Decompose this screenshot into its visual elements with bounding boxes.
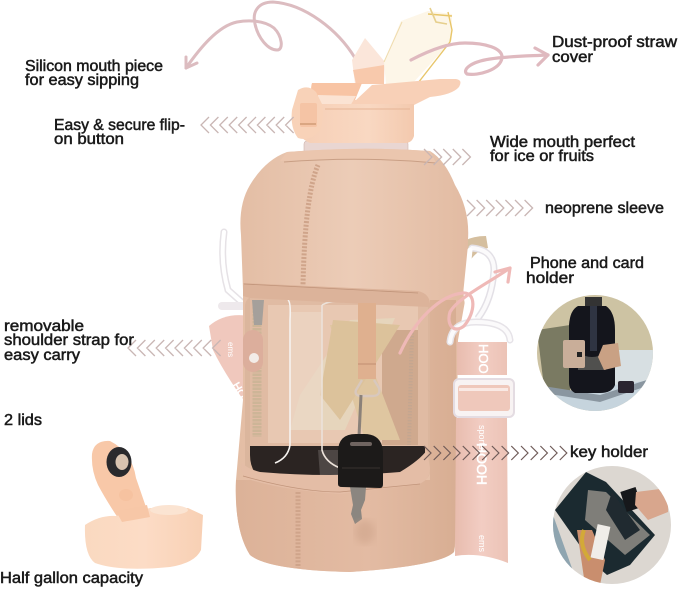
neoprene sleeve (236, 149, 468, 572)
lid brim (311, 83, 362, 100)
right inner stitched edge (409, 330, 412, 445)
chevrons: shoulder strap (128, 340, 221, 356)
lid (292, 79, 460, 143)
silicon mouth piece (352, 38, 385, 84)
label: neoprene sleeve: neoprene sleeve (545, 200, 664, 217)
chevrons: neoprene sleeve (467, 200, 533, 216)
half-gallon spare lid (85, 441, 203, 569)
tan webbing strap: right (444, 236, 488, 345)
pink arrow: phone and card holder (400, 268, 510, 353)
flip button (292, 87, 323, 139)
front strap with buckle: HOOH (474, 443, 490, 485)
white carabiner: left (222, 232, 246, 306)
cream cross straps (323, 318, 395, 430)
pink curly arrow: dust-proof straw cover (411, 43, 548, 74)
strap behind bottle: left: HOOH (229, 380, 256, 415)
label: wide mouth (490, 134, 636, 165)
lower pocket band (241, 450, 430, 494)
zipper pull (243, 330, 263, 372)
white carabiner: right (450, 248, 510, 342)
label: silicon mouth piece (25, 58, 163, 89)
strap behind bottle: left: ems (226, 342, 235, 357)
label: half gallon capacity: Half gallon capacity (0, 570, 143, 587)
white buckle (454, 379, 514, 417)
label: silicon mouth piece: Silicon mouth piece (25, 58, 163, 75)
zipper (252, 300, 262, 437)
strap behind bottle: left (209, 315, 256, 415)
label: wide mouth: Wide mouth perfect (490, 134, 636, 151)
bottle neck (304, 141, 408, 155)
label: flip-on button: on button (54, 131, 124, 148)
chevrons: key holder (424, 446, 567, 460)
key holder loop and key (338, 303, 383, 524)
lid base (85, 508, 203, 569)
label: phone and card holder (526, 255, 644, 287)
front strap with buckle (454, 342, 514, 563)
chevrons: flip-on button (201, 117, 294, 133)
label: flip-on button (54, 117, 185, 148)
pocket window (241, 283, 430, 494)
label: dust-proof straw cover (552, 34, 678, 66)
black base of bottle (250, 446, 425, 478)
label: silicon mouth piece: for easy sipping (25, 72, 139, 89)
label: shoulder strap (4, 318, 134, 364)
photo: phone and card holder (537, 295, 655, 411)
label: phone and card holder: holder (526, 270, 574, 287)
lid base (300, 104, 414, 143)
seam stitching (298, 165, 318, 568)
clear bottle outline (275, 300, 345, 468)
label: key holder: key holder (570, 444, 648, 461)
front strap with buckle: sports (477, 425, 487, 450)
dust-proof straw cover (384, 8, 452, 84)
label: wide mouth: for ice or fruits (490, 148, 594, 165)
label: dust-proof straw cover: cover (552, 49, 593, 66)
front strap with buckle: HOO (476, 344, 491, 374)
label: 2 lids: 2 lids (4, 412, 42, 429)
label: shoulder strap: removable (4, 318, 84, 335)
chevrons: wide mouth (424, 149, 470, 165)
label: shoulder strap: easy carry (4, 347, 80, 364)
top pocket band (243, 283, 430, 307)
label: flip-on button: Easy & secure flip- (54, 117, 185, 134)
label: dust-proof straw cover: Dust-proof straw (552, 34, 678, 51)
photo: key holder in use (553, 466, 671, 585)
flip cap (92, 441, 147, 518)
label: phone and card holder: Phone and card (530, 255, 644, 272)
pink curly arrow: silicon mouth piece (186, 2, 355, 68)
smudge on sleeve (355, 520, 375, 544)
label: shoulder strap: shoulder strap for (4, 332, 134, 349)
front strap with buckle: ems (477, 535, 487, 553)
